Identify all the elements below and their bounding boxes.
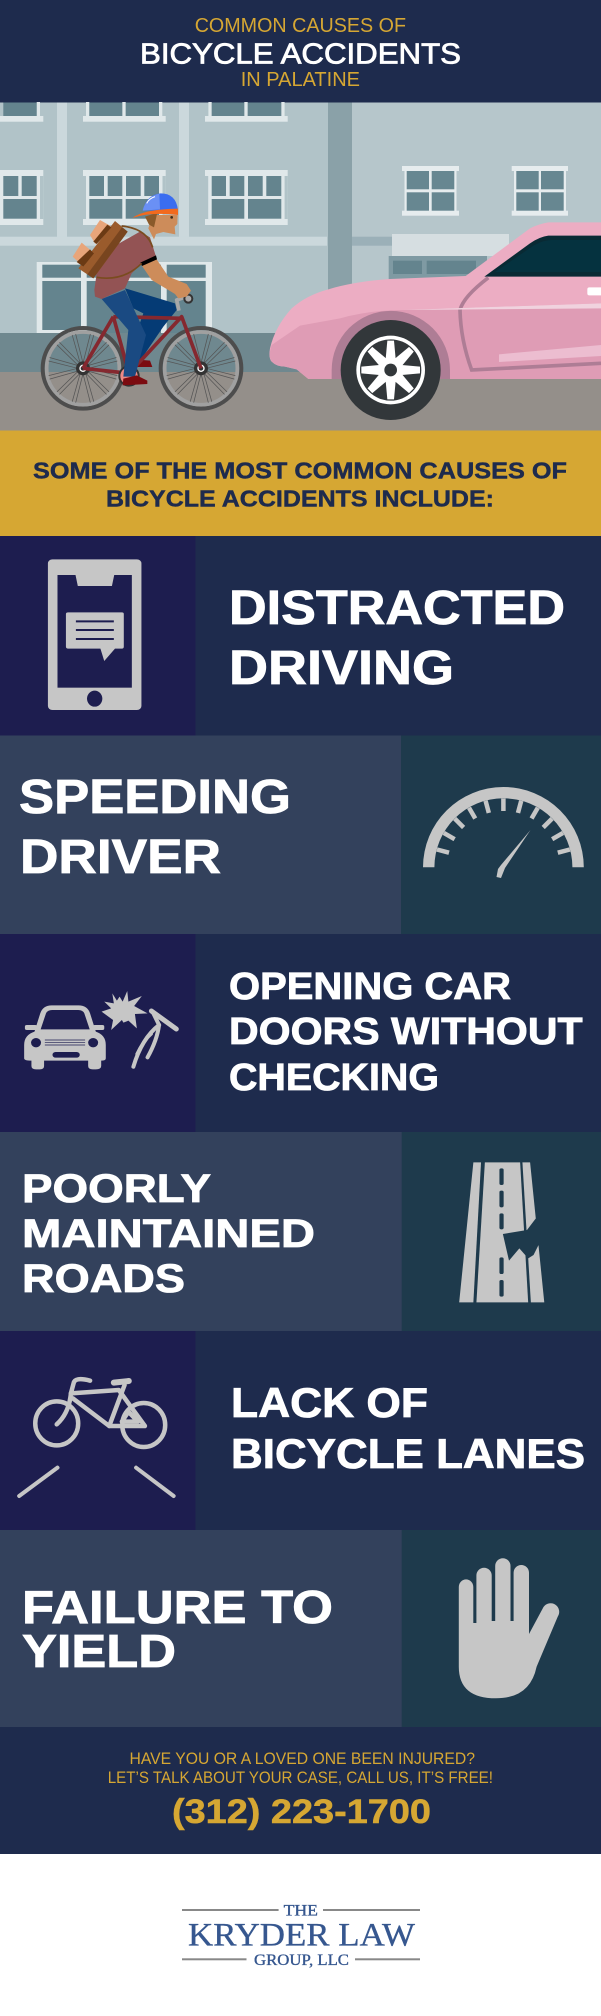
lower body panel	[270, 303, 601, 379]
near leg and shoe	[102, 290, 147, 385]
street scene illustration	[0, 102, 601, 431]
panel: opening car doors	[0, 934, 601, 1132]
ground floor window	[37, 262, 212, 334]
title line: common causes of: COMMON CAUSES OF	[195, 15, 406, 37]
heading: failure to yield: YIELD	[22, 1625, 176, 1677]
right building windows	[402, 166, 568, 216]
heading: lack of bicycle lanes: BICYCLE LANES	[231, 1430, 585, 1477]
invitation line: LET’S TALK ABOUT YOUR CASE, CALL US, IT’S FREE!	[108, 1768, 493, 1787]
heading: poorly maintained roads: ROADS	[22, 1257, 185, 1301]
panel: lack of bicycle lanes	[0, 1331, 601, 1530]
door handle	[587, 287, 601, 295]
panel: speeding driver	[0, 736, 601, 934]
middle floor windows	[0, 170, 288, 225]
phone number: (312) 223-1700	[172, 1793, 431, 1831]
windshield	[484, 236, 601, 277]
title line: in Palatine: IN PALATINE	[241, 69, 360, 91]
heading: speeding driver: SPEEDING	[19, 770, 291, 824]
heading: poorly maintained roads: POORLY	[22, 1167, 211, 1211]
logo: The Kryder Law Group, LLC: KRYDER LAW	[188, 1918, 416, 1954]
heading: distracted driving	[229, 581, 565, 695]
logo: The Kryder Law Group, LLC: GROUP, LLC	[254, 1952, 349, 1969]
icon: cracked road	[459, 1162, 544, 1302]
footer call to action	[0, 1727, 601, 1854]
logo: The Kryder Law Group, LLC	[182, 1903, 420, 1969]
far leg and shoe	[125, 288, 177, 367]
frame	[83, 317, 201, 373]
sidewalk	[0, 333, 601, 372]
intro text line 2: BICYCLE ACCIDENTS INCLUDE:	[106, 486, 494, 512]
question line: HAVE YOU OR A LOVED ONE BEEN INJURED?	[130, 1749, 475, 1768]
backpack	[73, 220, 153, 278]
pink car	[269, 222, 601, 420]
heading: opening car doors without checking: OPENING CAR	[229, 966, 511, 1008]
heading: failure to yield: FAILURE TO	[22, 1581, 333, 1633]
heading: speeding driver	[19, 770, 291, 884]
heading: poorly maintained roads: MAINTAINED	[22, 1212, 315, 1256]
door outline	[460, 278, 601, 370]
shirt	[94, 232, 156, 299]
panel: poorly maintained roads	[0, 1132, 601, 1331]
icon: car door collision with bicycle	[24, 991, 176, 1069]
pedal crank	[119, 366, 139, 386]
panel: failure to yield	[0, 1530, 601, 1727]
logo: The Kryder Law Group, LLC: THE	[284, 1903, 318, 1920]
heading: distracted driving: DRIVING	[229, 641, 454, 695]
intro text line 1: SOME OF THE MOST COMMON CAUSES OF	[33, 458, 567, 484]
road	[0, 372, 601, 431]
title line: bicycle accidents: BICYCLE ACCIDENTS	[140, 39, 461, 71]
buildings background	[0, 102, 601, 334]
heading: opening car doors without checking: CHECKING	[229, 1057, 439, 1099]
heading: distracted driving: DISTRACTED	[229, 581, 565, 635]
top floor windows	[0, 102, 288, 122]
panel: distracted driving	[0, 536, 601, 736]
header panel	[0, 0, 601, 102]
front wheel	[332, 311, 450, 420]
icon: bicycle with lane lines	[19, 1379, 174, 1496]
body highlights	[403, 303, 601, 362]
icon: raised hand	[459, 1558, 559, 1698]
bicycle and rider	[43, 193, 241, 409]
yellow intro banner	[0, 430, 601, 536]
helmet	[132, 193, 178, 218]
icon: speedometer	[423, 787, 584, 878]
shop front	[389, 234, 509, 282]
car body	[269, 222, 601, 379]
heading: speeding driver: DRIVER	[20, 830, 221, 884]
handlebar	[177, 295, 192, 311]
heading: poorly maintained roads	[22, 1167, 315, 1301]
wheels	[43, 328, 241, 409]
heading: opening car doors without checking	[229, 966, 583, 1099]
heading: lack of bicycle lanes: LACK OF	[231, 1379, 428, 1426]
icon: phone with message	[48, 559, 141, 710]
heading: opening car doors without checking: DOORS WITHOUT	[229, 1011, 583, 1053]
heading: failure to yield	[22, 1581, 333, 1677]
arm band	[140, 255, 157, 266]
head	[145, 213, 178, 239]
heading: lack of bicycle lanes	[231, 1379, 585, 1477]
arm	[141, 259, 191, 298]
